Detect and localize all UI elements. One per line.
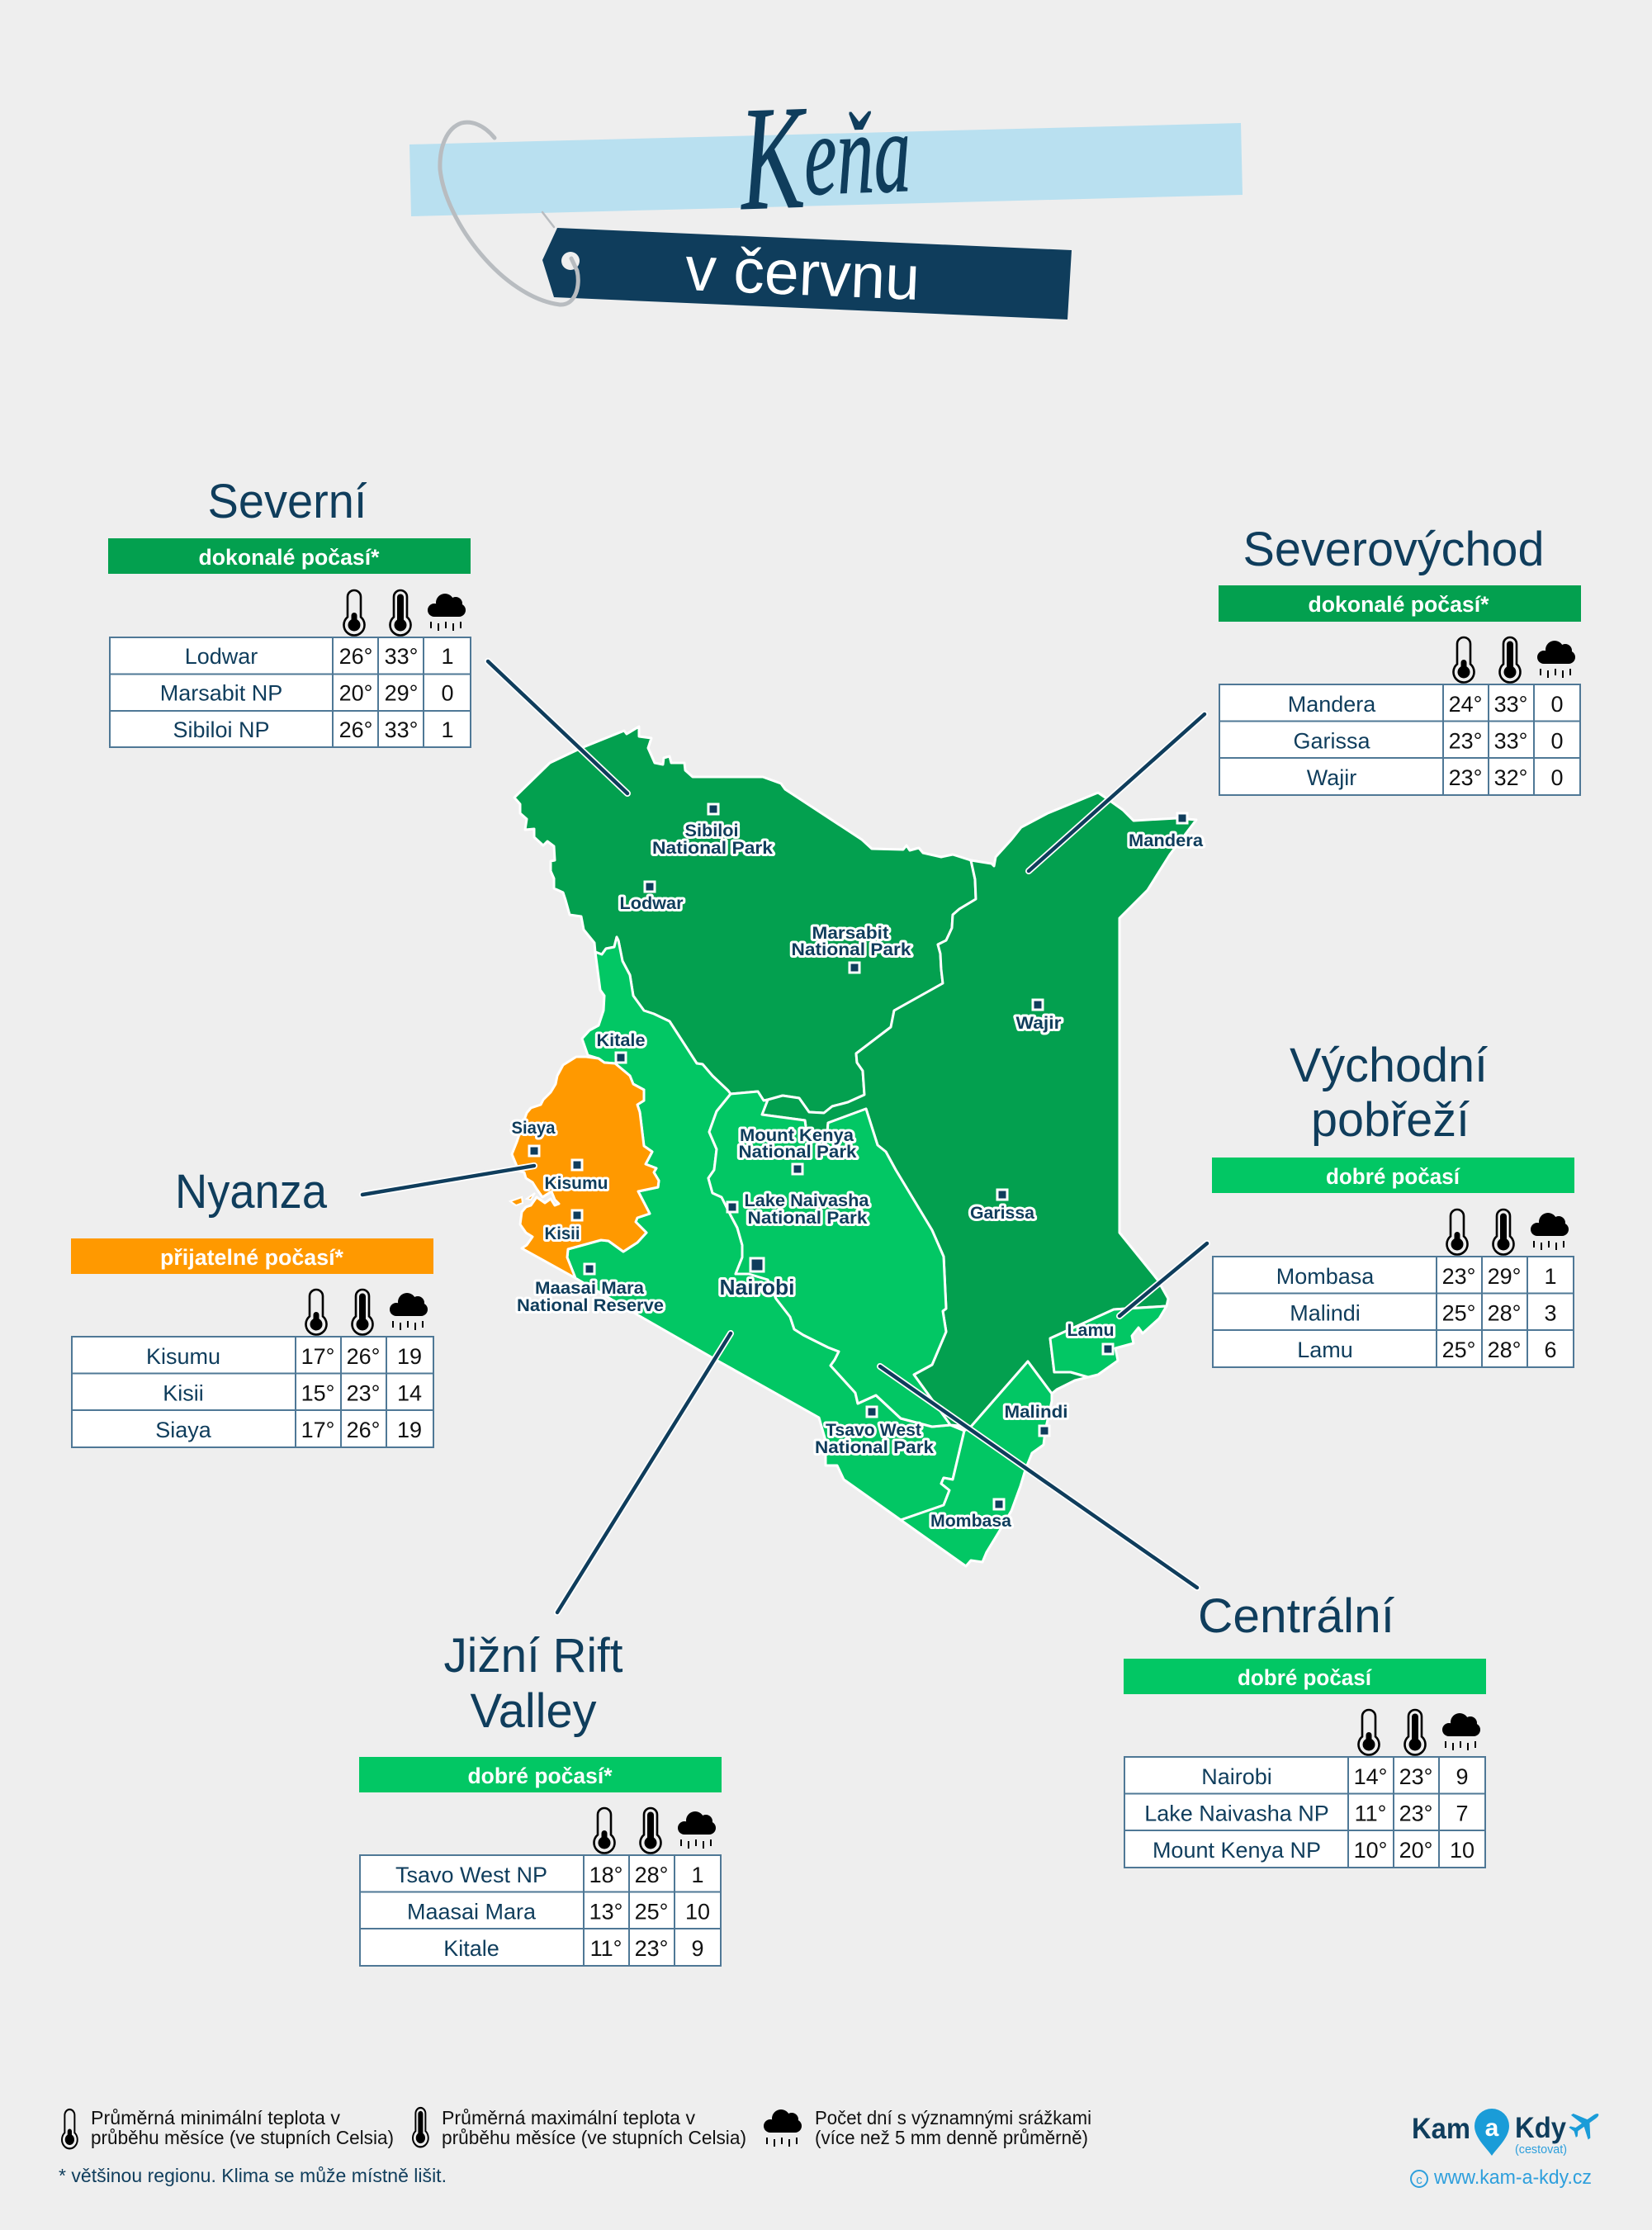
data table: 17° xyxy=(301,1418,334,1442)
data table: 23° xyxy=(1399,1764,1432,1789)
data table: 23° xyxy=(1449,728,1482,753)
data table: Mount Kenya NP xyxy=(1153,1838,1321,1863)
data table: 11° xyxy=(590,1936,622,1961)
data table: 29° xyxy=(1488,1264,1521,1289)
light blue title band xyxy=(409,123,1243,216)
icon: minimum temperature xyxy=(62,2109,78,2148)
map labels: Lodwar xyxy=(619,894,684,913)
map labels: Siaya xyxy=(512,1119,556,1138)
map labels: Mombasa xyxy=(930,1512,1011,1531)
Lake Victoria island xyxy=(510,1197,523,1205)
title: Keňa: eňa xyxy=(802,88,913,220)
logo: Kam a Kdy xyxy=(1412,2102,1607,2157)
data table: 28° xyxy=(1488,1338,1521,1362)
data table: 26° xyxy=(339,717,372,742)
data table: 13° xyxy=(589,1899,622,1924)
column icons xyxy=(1446,1210,1569,1255)
map labels: Lamu xyxy=(1067,1321,1115,1340)
panel: Jižní Rift Valley xyxy=(359,1629,722,1966)
data table: Sibiloi NP xyxy=(173,717,270,742)
data table: 33° xyxy=(1494,692,1527,717)
legend xyxy=(62,2107,1091,2148)
title: Keňa: K xyxy=(736,73,812,241)
region: Nyanza xyxy=(512,1057,659,1278)
data table: 20° xyxy=(1399,1838,1432,1863)
logo: Kam a Kdy: (cestovat) xyxy=(1515,2142,1567,2157)
data table: Kitale xyxy=(443,1936,499,1961)
rating bar xyxy=(71,1238,433,1274)
legend text: maximum temperature: průběhu měsíce (ve stupních Celsia) xyxy=(442,2127,746,2148)
data table: 3 xyxy=(1544,1301,1557,1326)
data table: Maasai Mara xyxy=(407,1899,537,1924)
rating bar: dobré počasí xyxy=(1238,1665,1372,1690)
title banner xyxy=(409,70,1243,320)
map labels: Maasai Mara xyxy=(535,1279,644,1298)
region: Severovýchod xyxy=(762,793,1196,1427)
rating bar xyxy=(1212,1158,1574,1193)
rating bar: dokonalé počasí* xyxy=(1308,592,1489,617)
heading: Valley xyxy=(471,1684,596,1738)
data table: Kisumu xyxy=(146,1344,220,1369)
city markers xyxy=(529,804,1187,1509)
data table: 23° xyxy=(347,1380,380,1405)
data table: 33° xyxy=(385,717,418,742)
data table: Siaya xyxy=(155,1418,212,1442)
map labels: National Park xyxy=(748,1209,868,1228)
region: Východní pobřeží south xyxy=(901,1361,1052,1566)
data table: 33° xyxy=(1494,728,1527,753)
map labels: Wajir xyxy=(1015,1014,1062,1033)
data table: 6 xyxy=(1544,1338,1557,1362)
data table: Nairobi xyxy=(1201,1764,1272,1789)
leader lines xyxy=(362,661,1207,1612)
region: Severní xyxy=(514,727,976,1113)
data table: 19 xyxy=(397,1418,422,1442)
column icons xyxy=(1453,637,1575,683)
data table: 1 xyxy=(441,644,454,669)
data table: 26° xyxy=(347,1344,380,1369)
data table: 0 xyxy=(441,680,454,705)
icon: location pin xyxy=(1474,2109,1509,2156)
legend text: minimum temperature: průběhu měsíce (ve stupních Celsia) xyxy=(91,2127,394,2148)
map labels: Kitale xyxy=(596,1031,646,1050)
data table xyxy=(1213,1257,1574,1367)
heading xyxy=(1290,1039,1488,1147)
data table: 25° xyxy=(1442,1301,1475,1326)
data table: 1 xyxy=(691,1863,704,1887)
navy tag xyxy=(542,228,1072,320)
map labels: National Park xyxy=(738,1143,857,1162)
map of Kenya xyxy=(510,727,1203,1566)
legend text: rainy days: (více než 5 mm denně průměrně) xyxy=(815,2127,1088,2148)
column icons xyxy=(305,1290,428,1335)
rating bar xyxy=(1124,1659,1486,1694)
data table: 26° xyxy=(339,644,372,669)
region: Východní pobřeží north (Lamu) xyxy=(1050,1306,1167,1377)
map labels: Nairobi xyxy=(720,1275,794,1300)
data table: 7 xyxy=(1456,1802,1469,1826)
heading: Severní xyxy=(208,475,367,528)
data table: Lodwar xyxy=(185,644,258,669)
data table: 33° xyxy=(385,644,418,669)
icon: rainy days xyxy=(764,2109,802,2147)
data table: 25° xyxy=(635,1899,668,1924)
panel: Východní pobřeží xyxy=(1212,1039,1574,1367)
data table: 20° xyxy=(339,680,372,705)
legend text: minimum temperature xyxy=(91,2107,394,2148)
legend text: maximum temperature xyxy=(442,2107,746,2148)
rating bar xyxy=(108,538,471,574)
column icons xyxy=(1359,1710,1480,1755)
rating bar: dobré počasí* xyxy=(467,1764,613,1788)
data table: 11° xyxy=(1355,1802,1386,1826)
data table: 26° xyxy=(347,1418,380,1442)
map labels: Malindi xyxy=(1004,1403,1068,1422)
data table: 29° xyxy=(385,680,418,705)
logo: Kam a Kdy: Kam xyxy=(1412,2113,1470,2145)
map labels: National Park xyxy=(652,839,773,858)
data table: 1 xyxy=(441,717,454,742)
data table: 9 xyxy=(1456,1764,1469,1789)
rating bar: dokonalé počasí* xyxy=(198,545,380,570)
data table: Kisii xyxy=(163,1380,204,1405)
heading: Nyanza xyxy=(175,1165,328,1219)
panel: Nyanza xyxy=(71,1165,433,1447)
data table: 25° xyxy=(1442,1338,1475,1362)
subtitle: v červnu: v červnu xyxy=(684,234,921,314)
Lake Victoria shore fragment xyxy=(527,1193,535,1200)
legend text: rainy days xyxy=(815,2107,1091,2148)
data table xyxy=(1124,1757,1485,1868)
heading: Východní xyxy=(1290,1039,1488,1092)
map labels: Tsavo West xyxy=(826,1421,921,1440)
data table: 10 xyxy=(1450,1838,1474,1863)
column icons xyxy=(343,590,466,636)
heading: pobřeží xyxy=(1311,1093,1470,1147)
logo: Kam a Kdy: Kdy xyxy=(1515,2112,1566,2144)
logo: Kam a Kdy: a xyxy=(1485,2114,1499,2142)
map labels: Kisumu xyxy=(545,1174,608,1193)
data table: Lamu xyxy=(1297,1338,1353,1362)
data table: 23° xyxy=(1449,765,1482,790)
map labels: Marsabit xyxy=(812,924,889,943)
data table: Tsavo West NP xyxy=(395,1863,547,1887)
data table: 15° xyxy=(301,1380,334,1405)
rating bar: přijatelné počasí* xyxy=(160,1245,343,1270)
map labels: Mount Kenya xyxy=(740,1126,854,1145)
website credit: c xyxy=(1416,2173,1422,2187)
rating bar xyxy=(359,1757,722,1792)
data table: 19 xyxy=(397,1344,422,1369)
map labels: Lake Naivasha xyxy=(745,1191,869,1210)
heading: Jižní Rift xyxy=(444,1629,622,1683)
map labels: Garissa xyxy=(970,1204,1034,1223)
legend text: rainy days: Počet dní s významnými srážkami xyxy=(815,2107,1091,2128)
rating bar: dobré počasí xyxy=(1326,1164,1460,1189)
data table: 10° xyxy=(1354,1838,1387,1863)
data table: Mombasa xyxy=(1276,1264,1375,1289)
data table: Lake Naivasha NP xyxy=(1144,1802,1329,1826)
legend text: maximum temperature: Průměrná maximální teplota v xyxy=(442,2107,696,2128)
data table: 1 xyxy=(1544,1264,1557,1289)
map labels: National Park xyxy=(791,940,911,959)
panel: Centrální xyxy=(1124,1589,1486,1868)
data table: 0 xyxy=(1550,728,1564,753)
rating bar xyxy=(1219,585,1581,622)
data table: Malindi xyxy=(1290,1301,1361,1326)
panel: Severovýchod xyxy=(1219,523,1581,795)
data table: 0 xyxy=(1550,765,1564,790)
map labels: Sibiloi xyxy=(685,821,738,840)
data table xyxy=(72,1337,433,1447)
data table: 17° xyxy=(301,1344,334,1369)
panel: Severní xyxy=(108,475,471,747)
data table: 24° xyxy=(1449,692,1482,717)
heading: Centrální xyxy=(1198,1589,1394,1643)
data table xyxy=(110,637,471,747)
legend text: minimum temperature: Průměrná minimální teplota v xyxy=(91,2107,341,2128)
data table: Garissa xyxy=(1293,728,1370,753)
data table: Marsabit NP xyxy=(160,680,282,705)
map labels: Mandera xyxy=(1129,831,1203,850)
map labels: National Reserve xyxy=(517,1296,664,1315)
data table: 10 xyxy=(685,1899,710,1924)
data table: 28° xyxy=(1488,1301,1521,1326)
icon: tag string loop xyxy=(440,122,578,305)
data table: 28° xyxy=(635,1863,668,1887)
icon: plane xyxy=(1564,2102,1607,2145)
data table: 9 xyxy=(691,1936,704,1961)
column icons xyxy=(594,1808,716,1854)
data table: 14 xyxy=(397,1380,422,1405)
data table: 23° xyxy=(635,1936,668,1961)
icon: maximum temperature xyxy=(413,2108,428,2147)
map labels: Kisii xyxy=(545,1224,580,1243)
data table: 23° xyxy=(1399,1802,1432,1826)
heading xyxy=(444,1629,622,1738)
data table: 18° xyxy=(589,1863,622,1887)
data table: 32° xyxy=(1494,765,1527,790)
data table: 23° xyxy=(1442,1264,1475,1289)
data table: 0 xyxy=(1550,692,1564,717)
website credit: www.kam-a-kdy.cz xyxy=(1433,2166,1592,2189)
region: Jižní Rift Valley xyxy=(567,937,964,1520)
data table: 14° xyxy=(1354,1764,1387,1789)
data table xyxy=(1219,684,1580,795)
data table: Mandera xyxy=(1288,692,1376,717)
heading: Severovýchod xyxy=(1243,523,1544,576)
map labels xyxy=(512,821,1203,1531)
map labels: National Park xyxy=(815,1438,934,1457)
footnote: * většinou regionu. Klima se může místně lišit. xyxy=(59,2165,447,2186)
data table xyxy=(360,1855,721,1966)
data table: Wajir xyxy=(1307,765,1356,790)
region: Centrální xyxy=(708,1091,950,1427)
